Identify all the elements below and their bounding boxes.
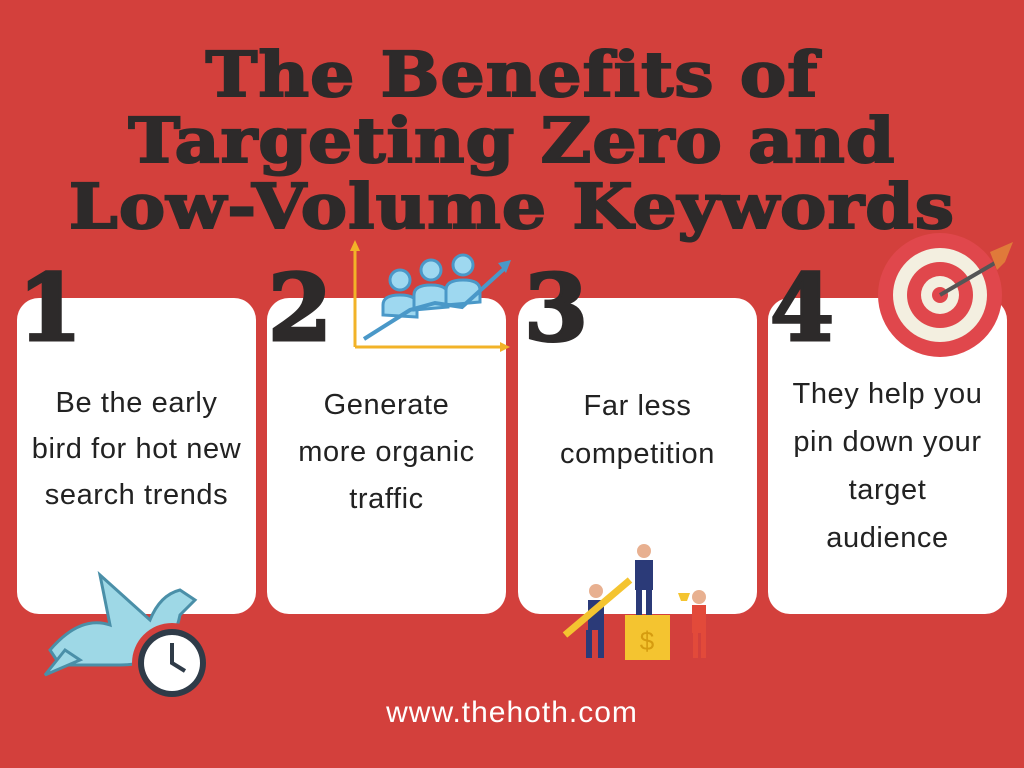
- card 4 text: audience: [826, 522, 949, 554]
- card 2: [267, 298, 506, 614]
- title: Targeting Zero and: [128, 104, 896, 177]
- footer: www.thehoth.com: [386, 696, 638, 729]
- card 4 text: They help you: [792, 378, 982, 410]
- card 3 text: Far less: [584, 390, 691, 422]
- title: The Benefits of: [206, 38, 818, 111]
- card 3: [518, 298, 757, 614]
- card 1: [17, 298, 256, 614]
- card 3 text: competition: [560, 438, 715, 470]
- number 1: 1: [18, 254, 82, 362]
- card 1 text: search trends: [45, 479, 228, 511]
- icon: podium people: $: [640, 626, 655, 656]
- card 4 text: [792, 378, 982, 554]
- card 3 text: [560, 390, 715, 470]
- title: [69, 38, 955, 243]
- card 4: [768, 298, 1007, 614]
- card 1 text: bird for hot new: [32, 433, 241, 465]
- title: Low-Volume Keywords: [69, 170, 955, 243]
- card 2 text: traffic: [349, 483, 424, 515]
- card 2 text: more organic: [298, 436, 475, 468]
- card 2 text: [298, 389, 475, 515]
- icon: podium people: [562, 544, 706, 660]
- number 2: 2: [268, 254, 332, 362]
- card 4 text: target: [849, 474, 926, 506]
- number 4: 4: [770, 254, 834, 362]
- icon: growth chart: [350, 240, 511, 352]
- number 3: 3: [524, 254, 588, 362]
- card 2 text: Generate: [324, 389, 449, 421]
- card 1 text: Be the early: [56, 387, 217, 419]
- card 1 text: [32, 387, 241, 511]
- icon: bird with clock: [44, 571, 206, 697]
- card 4 text: pin down your: [793, 426, 982, 458]
- icon: target: [878, 233, 1013, 357]
